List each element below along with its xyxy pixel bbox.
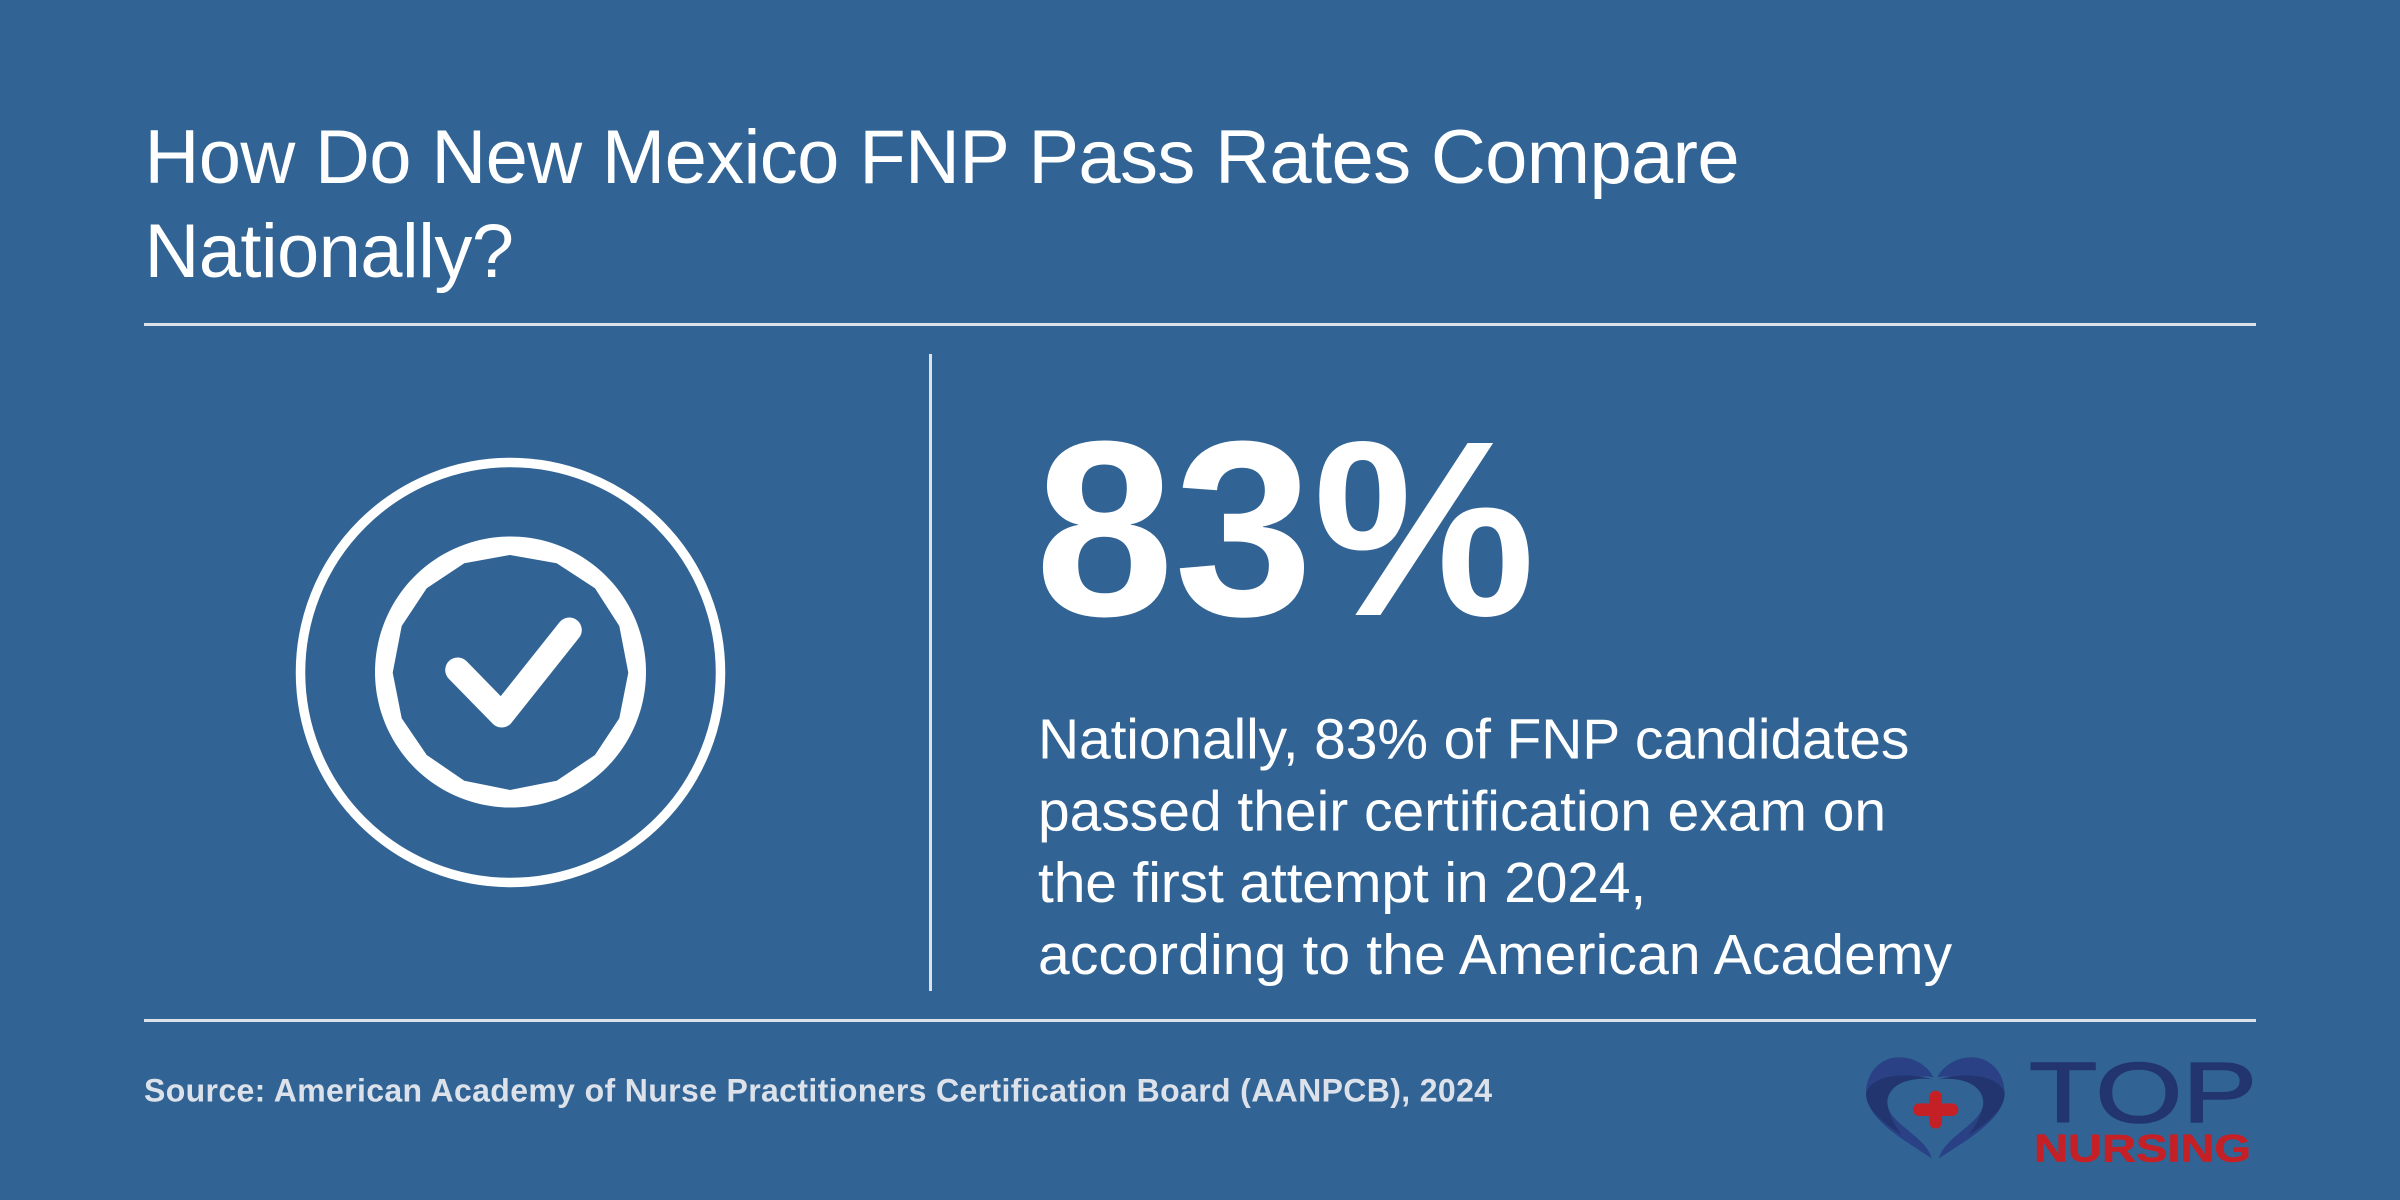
logo: NURSING bbox=[2034, 1128, 2251, 1170]
title: How Do New Mexico FNP Pass Rates Compare bbox=[144, 115, 1739, 200]
description bbox=[1038, 707, 1953, 987]
title bbox=[144, 115, 1739, 294]
logo: TOP bbox=[2029, 1046, 2257, 1141]
description: according to the American Academy bbox=[1038, 923, 1953, 987]
logo heart bbox=[1866, 1057, 2005, 1158]
icon: check badge bbox=[300, 462, 720, 882]
big statistic: 83% bbox=[1035, 389, 1535, 668]
title: Nationally? bbox=[144, 209, 513, 294]
source: Source: American Academy of Nurse Practitioners Certification Board (AANPCB), 2024 bbox=[144, 1072, 1492, 1108]
logo bbox=[1866, 1046, 2257, 1170]
description: the first attempt in 2024, bbox=[1038, 851, 1646, 915]
description: Nationally, 83% of FNP candidates bbox=[1038, 707, 1909, 771]
description: passed their certification exam on bbox=[1038, 779, 1886, 843]
